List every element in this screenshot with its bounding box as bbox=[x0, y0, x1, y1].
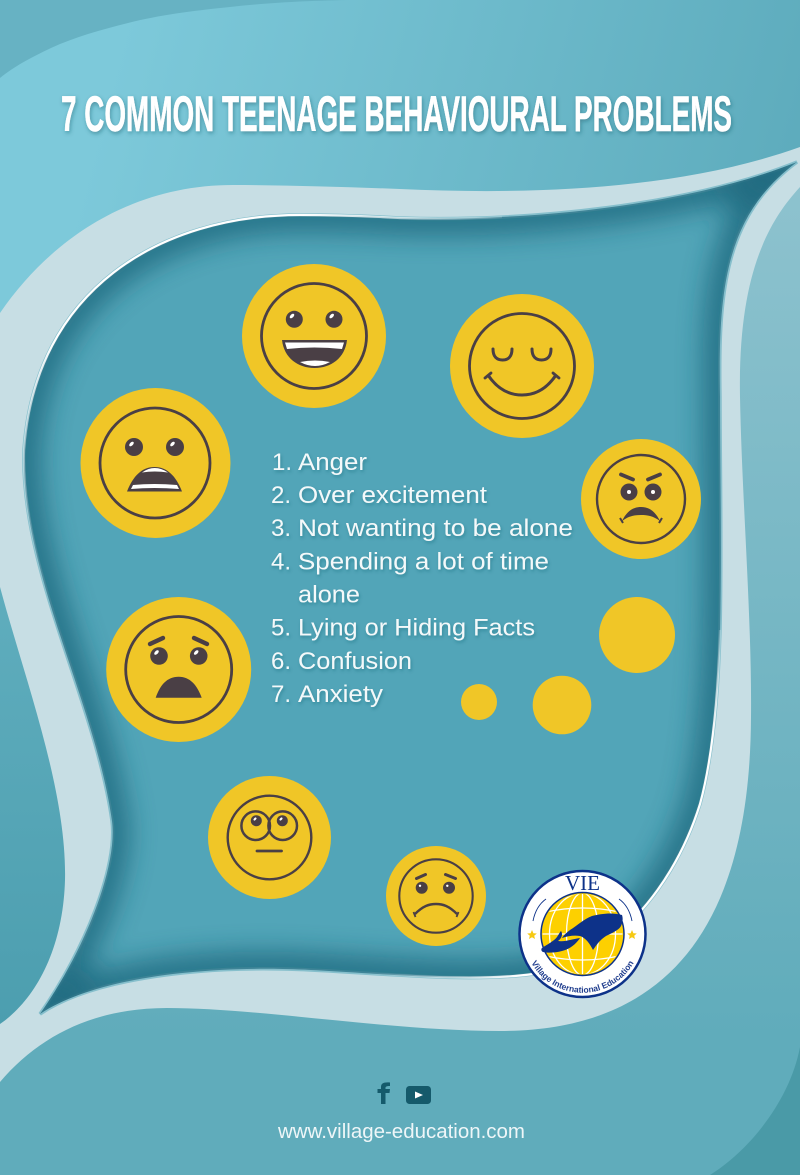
emoji: scared bbox=[80, 388, 230, 538]
emoji: rolling eyes bbox=[208, 776, 331, 899]
numbered list: Confusion bbox=[298, 648, 412, 675]
numbered list: 1. bbox=[272, 449, 292, 476]
numbered list: alone bbox=[298, 582, 360, 608]
logo: Village International Education: VIE bbox=[565, 871, 600, 895]
decorative yellow dots bbox=[461, 597, 675, 734]
emoji: distressed bbox=[106, 597, 251, 742]
numbered list: 5. bbox=[271, 614, 291, 642]
icon: facebook bbox=[378, 1082, 390, 1104]
numbered list: 3. bbox=[271, 515, 291, 542]
numbered list: 6. bbox=[271, 648, 291, 675]
numbered list: 4. bbox=[271, 548, 291, 576]
numbered list: Anxiety bbox=[298, 681, 383, 708]
numbered list: 2. bbox=[271, 482, 291, 509]
website url: www.village-education.com bbox=[277, 1121, 525, 1143]
central panel bbox=[22, 160, 798, 1016]
logo: Village International Education bbox=[518, 870, 647, 998]
top-left darker corner bbox=[0, 0, 347, 78]
left background panel bbox=[0, 580, 120, 1030]
numbered list: Anger bbox=[298, 449, 367, 476]
numbered list: Lying or Hiding Facts bbox=[298, 614, 535, 642]
emoji: big grin bbox=[242, 264, 386, 408]
emoji: angry bbox=[581, 439, 701, 559]
numbered list: Not wanting to be alone bbox=[298, 515, 573, 542]
numbered list bbox=[271, 449, 573, 708]
icon: youtube bbox=[406, 1086, 431, 1104]
emoji: sad bbox=[386, 846, 486, 946]
logo: Village International Education: Village International Education bbox=[532, 960, 634, 993]
numbered list: 7. bbox=[271, 681, 291, 708]
light frame band bbox=[0, 147, 800, 1082]
emoji: calm smile bbox=[450, 294, 594, 438]
bottom-right darker corner bbox=[710, 1047, 800, 1175]
numbered list: Spending a lot of time bbox=[298, 548, 549, 576]
numbered list: Over excitement bbox=[298, 482, 487, 509]
